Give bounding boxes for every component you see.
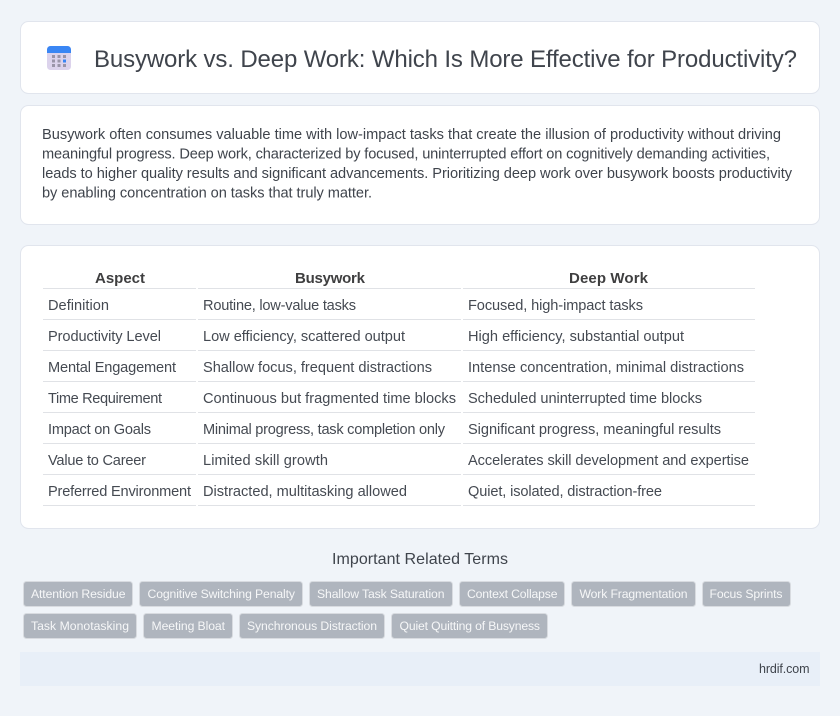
- row: Value to Career: Accelerates skill development and expertise: [468, 453, 749, 469]
- row: Time Requirement: Continuous but fragmented time blocks: [203, 391, 456, 407]
- summary paragraph: by enabling concentration on tasks that truly matter.: [42, 186, 372, 202]
- panel: summary text: [20, 106, 820, 224]
- tag: Meeting Bloat: Meeting Bloat: [152, 619, 226, 633]
- tag: Quiet Quitting of Busyness: Quiet Quitting of Busyness: [400, 619, 540, 633]
- footer source text: hrdif.com: [759, 662, 810, 676]
- row: Definition: Routine, low-value tasks: [203, 298, 356, 314]
- tag: Task Monotasking: Task Monotasking: [31, 619, 129, 633]
- row: Preferred Environment: Quiet, isolated, distraction-free: [468, 484, 662, 500]
- row: Productivity Level: Low efficiency, scattered output: [203, 329, 405, 345]
- tag: Context Collapse: Context Collapse: [467, 587, 558, 601]
- row: Preferred Environment: [48, 484, 662, 500]
- row: Mental Engagement: Shallow focus, frequent distractions: [203, 360, 432, 376]
- row: Value to Career: Limited skill growth: [203, 453, 328, 469]
- row: Productivity Level: High efficiency, substantial output: [468, 329, 684, 345]
- tag: Focus Sprints: Focus Sprints: [710, 587, 782, 601]
- tag: Context Collapse: [460, 582, 564, 606]
- summary paragraph: Busywork often consumes valuable time with low-impact tasks that create the illusion of productivity without driving: [42, 127, 781, 143]
- row: Productivity Level: [48, 329, 684, 345]
- panel: comparison table: [20, 246, 820, 528]
- summary paragraph: leads to higher quality results and significant advancements. Prioritizing deep work over busywork boosts productivity: [42, 166, 793, 182]
- tag: Shallow Task Saturation: Shallow Task Saturation: [317, 587, 444, 601]
- tag: Attention Residue: Attention Residue: [31, 587, 126, 601]
- tag: Cognitive Switching Penalty: [140, 582, 302, 606]
- table header row: Busywork: [295, 270, 366, 287]
- table header row: Aspect: [95, 270, 145, 287]
- row: Mental Engagement: Mental Engagement: [48, 360, 176, 376]
- row: Preferred Environment: Preferred Environment: [48, 484, 191, 500]
- row: Impact on Goals: Significant progress, meaningful results: [468, 422, 721, 438]
- row: Value to Career: Value to Career: [48, 453, 146, 469]
- row: Time Requirement: [48, 391, 702, 407]
- summary paragraph: meaningful progress. Deep work, characterized by focused, uninterrupted effort on cognitively demanding activities,: [42, 146, 770, 162]
- row: Value to Career: [48, 453, 749, 469]
- tag: Synchronous Distraction: [240, 614, 384, 638]
- tag: Attention Residue: [24, 582, 132, 606]
- tag: Quiet Quitting of Busyness: [392, 614, 548, 638]
- tag: Task Monotasking: [24, 614, 136, 638]
- row: Mental Engagement: [48, 360, 744, 376]
- row: Impact on Goals: Minimal progress, task completion only: [203, 422, 446, 438]
- tag: Work Fragmentation: Work Fragmentation: [580, 587, 688, 601]
- tag: Work Fragmentation: [572, 582, 696, 606]
- tags: related terms: [24, 582, 790, 638]
- row: Mental Engagement: Intense concentration, minimal distractions: [468, 360, 744, 376]
- icon: calendar: [47, 46, 71, 70]
- row: Productivity Level: Productivity Level: [48, 329, 161, 345]
- row: Definition: Focused, high-impact tasks: [468, 298, 643, 314]
- tag: Synchronous Distraction: Synchronous Distraction: [247, 619, 377, 633]
- tag: Focus Sprints: [702, 582, 790, 606]
- row: Impact on Goals: Impact on Goals: [48, 422, 151, 438]
- row: Preferred Environment: Distracted, multitasking allowed: [203, 484, 407, 500]
- tag: Shallow Task Saturation: [310, 582, 452, 606]
- table header row: Deep Work: [569, 270, 649, 287]
- tag: Cognitive Switching Penalty: Cognitive Switching Penalty: [148, 587, 296, 601]
- row: Time Requirement: Scheduled uninterrupted time blocks: [468, 391, 702, 407]
- tag: Meeting Bloat: [144, 614, 232, 638]
- row: Time Requirement: Time Requirement: [48, 391, 162, 407]
- row: Definition: [48, 298, 643, 314]
- row: Impact on Goals: [48, 422, 721, 438]
- summary paragraph: [42, 127, 793, 202]
- title: Busywork vs. Deep Work: Which Is More Effective for Productivity?: [94, 46, 797, 73]
- heading: related terms: Important Related Terms: [332, 551, 508, 568]
- footer bar: [20, 652, 820, 686]
- table header row: [95, 270, 649, 287]
- row: Definition: Definition: [48, 298, 109, 314]
- header panel: [20, 22, 820, 94]
